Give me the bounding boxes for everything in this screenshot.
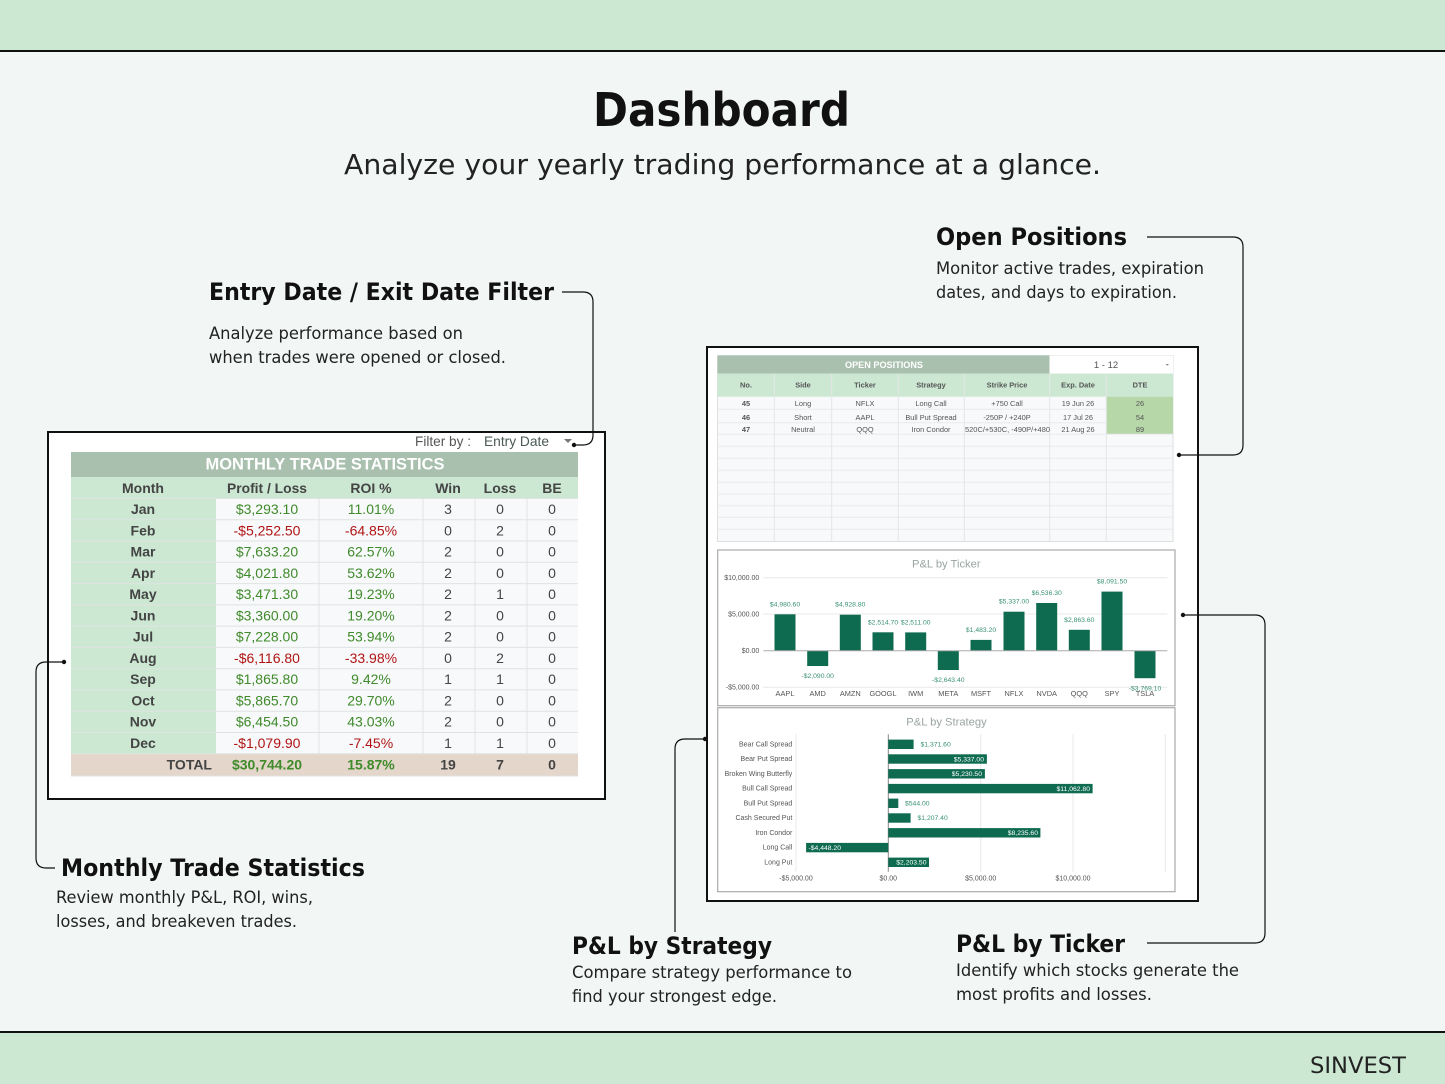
position 47: 520C/+530C, -490P/+480	[965, 425, 1050, 434]
row Feb: 0	[548, 522, 556, 538]
value labels: -$2,090.00	[801, 673, 834, 680]
row Feb	[131, 522, 556, 538]
row Dec: 1	[496, 735, 504, 751]
table header	[740, 381, 1147, 390]
callout: entry date filter: Entry Date / Exit Date Filter	[209, 278, 554, 306]
row May: 19.23%	[347, 586, 395, 602]
row Apr: $4,021.80	[236, 565, 298, 581]
row Oct: $5,865.70	[236, 692, 298, 708]
position 45: 45	[742, 399, 750, 408]
table header: Exp. Date	[1061, 381, 1095, 390]
callout: pnl by strategy: find your strongest edge.	[572, 987, 777, 1006]
row Oct: 2	[444, 692, 452, 708]
row Aug: -33.98%	[345, 650, 397, 666]
row Dec: -7.45%	[349, 735, 393, 751]
row Jul	[133, 629, 556, 645]
row Dec: 1	[444, 735, 452, 751]
total row: 15.87%	[347, 756, 395, 772]
row Nov: Nov	[130, 714, 156, 730]
chart title: P&L by Ticker	[912, 558, 981, 570]
header row: Profit / Loss	[227, 480, 307, 496]
value labels: $4,980.60	[770, 602, 800, 608]
category labels: Iron Condor	[755, 830, 793, 837]
connector: strategy	[675, 737, 707, 932]
row Nov: 2	[444, 714, 452, 730]
row Sep: 9.42%	[351, 671, 391, 687]
category labels: Bear Put Spread	[741, 756, 792, 763]
row Apr: 0	[496, 565, 504, 581]
connector: ticker	[1147, 613, 1265, 943]
row Dec: -$1,079.90	[234, 735, 301, 751]
callout: pnl by ticker	[956, 930, 1239, 1004]
table header: Side	[795, 381, 811, 390]
callout: pnl by strategy	[572, 932, 852, 1006]
header row: ROI %	[350, 480, 392, 496]
position 46	[742, 413, 1144, 422]
table header: Strategy	[916, 381, 947, 390]
row Mar: 0	[496, 544, 504, 560]
open positions table	[718, 356, 1173, 542]
value labels: $1,371.60	[920, 742, 951, 748]
connector: monthly stats	[36, 660, 66, 868]
position 45: 26	[1136, 399, 1144, 408]
value labels: $544.00	[905, 800, 930, 808]
row Jun: 19.20%	[347, 607, 395, 623]
row Jun: Jun	[131, 607, 155, 623]
table title	[718, 356, 1050, 374]
category labels: Bull Put Spread	[744, 800, 792, 807]
row May: 0	[548, 586, 556, 602]
top band	[0, 0, 1445, 52]
callout: open positions	[936, 223, 1204, 302]
bottom band	[0, 1031, 1445, 1084]
total row: 0	[548, 756, 556, 772]
x axis labels: META	[938, 689, 958, 698]
row Oct: 0	[496, 692, 504, 708]
row Apr	[131, 565, 556, 581]
row Feb: Feb	[131, 522, 155, 538]
brand name: SINVEST	[1310, 1054, 1407, 1079]
row Aug: 2	[496, 650, 504, 666]
position 46: 17 Jul 26	[1063, 413, 1093, 422]
value labels: $2,511.00	[901, 620, 931, 626]
row Jan: Jan	[131, 501, 155, 517]
row Feb: 0	[444, 522, 452, 538]
row May: May	[129, 586, 157, 602]
table title	[71, 452, 578, 477]
row Aug: -$6,116.80	[234, 650, 300, 666]
position 45: 19 Jun 26	[1062, 399, 1094, 408]
position 45: Long	[795, 399, 811, 408]
row Oct: 0	[548, 692, 556, 708]
row Jan: 11.01%	[348, 501, 394, 517]
x axis labels: MSFT	[971, 689, 992, 698]
x axis labels: GOOGL	[869, 689, 897, 698]
row Sep: 1	[444, 671, 452, 687]
row Mar: 2	[444, 544, 452, 560]
bars	[774, 592, 1156, 678]
x axis labels: $5,000.00	[965, 876, 996, 882]
filter control	[415, 433, 572, 449]
callout: entry date filter	[209, 278, 554, 367]
filter control: Entry Date	[484, 433, 549, 449]
row Jul: 0	[496, 629, 504, 645]
chart: pnl by ticker	[718, 550, 1175, 706]
x axis labels: SPY	[1105, 689, 1119, 698]
table header: Ticker	[854, 381, 876, 390]
category labels: Long Put	[764, 859, 792, 866]
total row: $30,744.20	[232, 756, 302, 772]
row Sep: Sep	[130, 671, 156, 687]
callout: entry date filter: Analyze performance based on	[209, 324, 463, 343]
y axis labels: $10,000.00	[724, 575, 759, 582]
row Jul: 0	[548, 629, 556, 645]
callout: pnl by strategy: Compare strategy performance to	[572, 963, 852, 982]
position 47: Neutral	[791, 425, 815, 434]
row Dec	[130, 735, 556, 751]
position 45: Long Call	[915, 399, 947, 408]
value labels	[770, 578, 1161, 692]
row Sep: 1	[496, 671, 504, 687]
header row: Month	[122, 480, 164, 496]
category labels: Broken Wing Butterfly	[725, 771, 793, 778]
x axis labels: AMZN	[840, 689, 861, 698]
callout: open positions: Open Positions	[936, 223, 1127, 251]
value labels: $1,207.40	[918, 815, 948, 822]
row Jun: 2	[444, 607, 452, 623]
row Nov: 0	[496, 714, 504, 730]
table header: Strike Price	[987, 381, 1027, 390]
y axis labels: -$5,000.00	[726, 684, 759, 692]
position 47	[742, 425, 1144, 434]
value labels: $5,337.00	[999, 598, 1029, 606]
connector: open positions	[1147, 237, 1243, 457]
row Sep: $1,865.80	[236, 671, 298, 687]
value labels: $6,536.30	[1032, 590, 1062, 597]
total row: TOTAL	[167, 756, 212, 772]
x axis labels: NVDA	[1036, 689, 1057, 698]
row May	[129, 586, 556, 602]
table title: OPEN POSITIONS	[845, 360, 923, 370]
row Feb: 2	[496, 522, 504, 538]
header row: Win	[435, 480, 461, 496]
position 47: 21 Aug 26	[1061, 425, 1095, 434]
position 45	[742, 399, 1144, 408]
x axis labels: $10,000.00	[1055, 876, 1091, 882]
row Jul: 2	[444, 629, 452, 645]
row Jul: 53.94%	[347, 629, 395, 645]
y axis labels	[724, 575, 759, 692]
row Jul: $7,228.00	[236, 629, 298, 645]
row May: 2	[444, 586, 452, 602]
row May: $3,471.30	[236, 586, 298, 602]
row Apr: 0	[548, 565, 556, 581]
value labels: $2,203.50	[896, 860, 927, 866]
value labels: -$3,769.10	[1129, 686, 1161, 692]
total row	[167, 756, 556, 772]
table title: MONTHLY TRADE STATISTICS	[206, 456, 444, 474]
x axis labels: IWM	[908, 689, 923, 698]
position 47: 47	[742, 425, 750, 434]
x axis labels: NFLX	[1005, 689, 1024, 698]
x axis labels: $0.00	[880, 876, 897, 882]
title: Dashboard	[593, 83, 850, 137]
table header: No.	[740, 381, 752, 390]
row Aug	[129, 650, 556, 666]
chart: pnl by strategy	[718, 708, 1175, 892]
callout: entry date filter: when trades were opened or closed.	[209, 348, 506, 367]
callout: monthly trade statistics: Review monthly P&L, ROI, wins,	[56, 888, 313, 907]
category labels: Cash Secured Put	[735, 815, 792, 822]
row Jan: 0	[548, 501, 556, 517]
panel: monthly trade statistics	[48, 432, 605, 799]
position 46: AAPL	[856, 413, 874, 422]
position 47: QQQ	[856, 425, 874, 434]
value labels: $5,337.00	[954, 756, 984, 763]
value labels: $5,230.50	[952, 771, 982, 778]
x axis labels	[779, 876, 1091, 882]
callout: pnl by ticker: most profits and losses.	[956, 985, 1152, 1004]
callout: monthly trade statistics	[56, 854, 365, 931]
callout: monthly trade statistics: losses, and breakeven trades.	[56, 912, 297, 931]
value labels: $8,091.50	[1097, 578, 1127, 586]
row Nov: 43.03%	[347, 714, 395, 730]
category labels: Long Call	[763, 844, 793, 852]
header row	[122, 480, 562, 496]
row Jun: $3,360.00	[236, 607, 298, 623]
callout: pnl by ticker: Identify which stocks generate the	[956, 961, 1239, 980]
value labels: $11,062.80	[1056, 786, 1090, 793]
value labels: $2,863.60	[1064, 617, 1095, 624]
row Jun: 0	[548, 607, 556, 623]
panel: dashboard charts	[707, 347, 1198, 901]
y axis labels: $5,000.00	[728, 612, 759, 618]
value labels: -$4,448.20	[808, 845, 841, 852]
row Jul: Jul	[133, 629, 153, 645]
position 47: 89	[1136, 425, 1144, 434]
position 46: 54	[1136, 413, 1144, 422]
row Aug: 0	[444, 650, 452, 666]
row Nov: 0	[548, 714, 556, 730]
filter control: Filter by :	[415, 433, 471, 449]
total row: 7	[496, 756, 504, 772]
row Oct	[131, 692, 556, 708]
x axis labels: AAPL	[776, 689, 794, 698]
value labels	[808, 742, 1090, 866]
category labels: Bear Call Spread	[739, 741, 792, 748]
total row: 19	[440, 756, 456, 772]
row Mar: $7,633.20	[236, 544, 298, 560]
row Mar: 0	[548, 544, 556, 560]
row Oct: 29.70%	[347, 692, 395, 708]
position 47: Iron Condor	[911, 425, 951, 434]
row Apr: 53.62%	[347, 565, 395, 581]
callout: open positions: dates, and days to expiration.	[936, 283, 1177, 302]
row Jun: 0	[496, 607, 504, 623]
row Mar: 62.57%	[347, 544, 395, 560]
row Jan	[131, 501, 556, 517]
table	[71, 452, 578, 776]
row Aug: 0	[548, 650, 556, 666]
table header: DTE	[1133, 381, 1147, 390]
callout: monthly trade statistics: Monthly Trade Statistics	[61, 854, 365, 882]
category labels: Bull Call Spread	[742, 786, 792, 792]
row Jan: $3,293.10	[236, 501, 298, 517]
subtitle: Analyze your yearly trading performance at a glance.	[344, 148, 1101, 181]
value labels: $1,483.20	[966, 627, 996, 634]
value labels: $2,514.70	[868, 620, 898, 626]
row Dec: 0	[548, 735, 556, 751]
position 45: +750 Call	[991, 399, 1023, 408]
x axis labels: TSLA	[1136, 689, 1154, 698]
row Feb: -$5,252.50	[234, 522, 301, 538]
row Apr: Apr	[131, 565, 156, 581]
header row: Loss	[484, 480, 517, 496]
row Sep	[130, 671, 556, 687]
row Dec: Dec	[130, 735, 156, 751]
row Apr: 2	[444, 565, 452, 581]
value labels: $4,928.80	[835, 602, 866, 608]
position 46: -250P / +240P	[983, 413, 1031, 422]
x axis labels: QQQ	[1071, 689, 1088, 698]
position 46: Bull Put Spread	[905, 413, 957, 422]
x axis labels: AMD	[809, 689, 826, 698]
range selector	[1050, 356, 1173, 374]
position 46: 46	[742, 413, 750, 422]
bars	[806, 740, 1093, 867]
row Sep: 0	[548, 671, 556, 687]
row Oct: Oct	[131, 692, 155, 708]
range selector: 1 - 12	[1094, 360, 1118, 371]
row Nov	[130, 714, 556, 730]
y axis labels: $0.00	[742, 648, 759, 655]
x axis labels: -$5,000.00	[779, 876, 813, 882]
callout: pnl by ticker: P&L by Ticker	[956, 930, 1125, 958]
value labels: $8,235.60	[1008, 830, 1038, 837]
x axis labels	[776, 689, 1154, 698]
row Aug: Aug	[129, 650, 157, 666]
callout: open positions: Monitor active trades, expiration	[936, 259, 1204, 278]
row Feb: -64.85%	[345, 522, 397, 538]
chart title: P&L by Strategy	[906, 717, 987, 729]
row Jan: 0	[496, 501, 504, 517]
callout: pnl by strategy: P&L by Strategy	[572, 932, 772, 960]
category labels	[725, 741, 793, 866]
position 46: Short	[794, 413, 812, 422]
row Jun	[131, 607, 556, 623]
position 45: NFLX	[856, 399, 875, 408]
row Nov: $6,454.50	[236, 714, 298, 730]
value labels: -$2,643.40	[932, 677, 965, 684]
header row: BE	[542, 480, 562, 496]
row May: 1	[496, 586, 504, 602]
row Jan: 3	[444, 501, 452, 517]
row Mar: Mar	[131, 544, 156, 560]
row Mar	[131, 544, 556, 560]
connector: filter	[562, 292, 593, 447]
